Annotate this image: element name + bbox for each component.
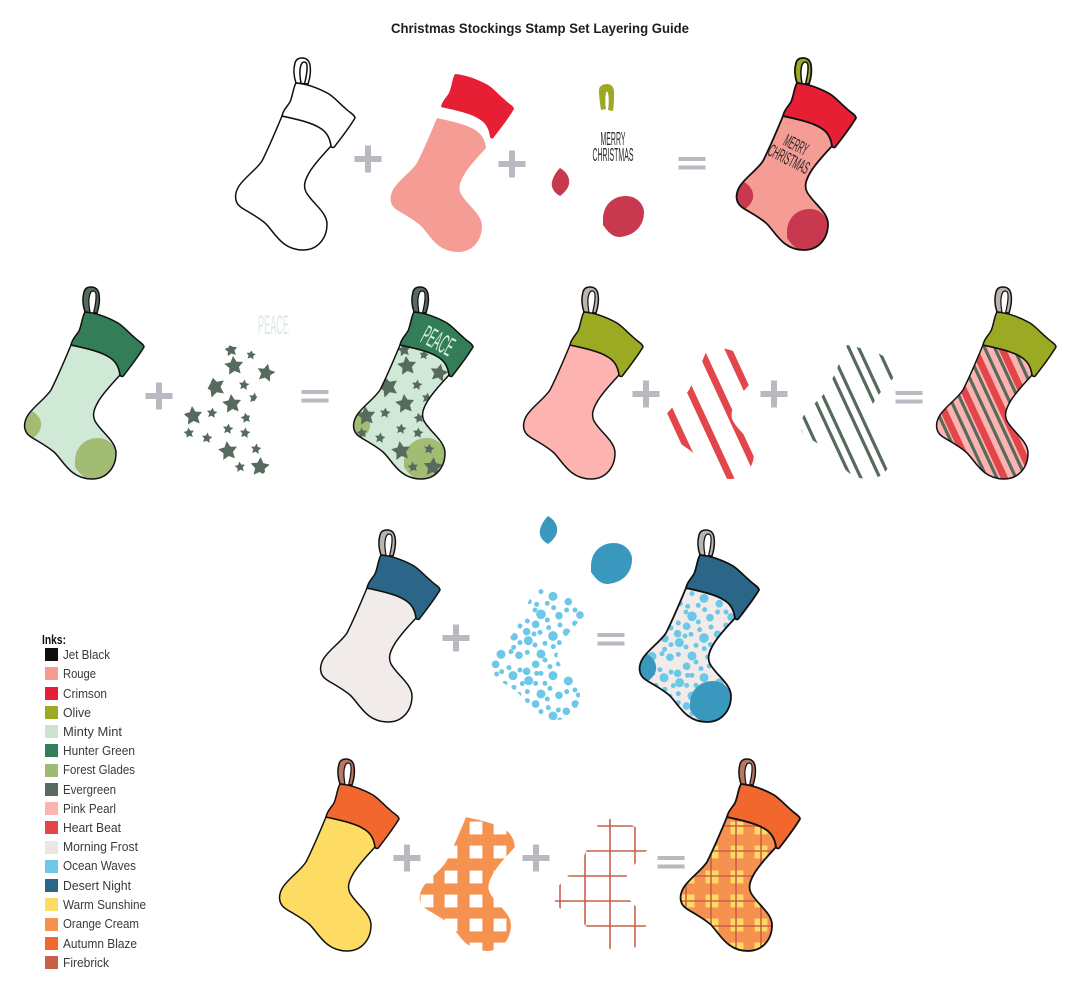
stocking: finished plaid — [680, 758, 801, 952]
legend: inks — [42, 633, 146, 970]
legend: inks: Morning Frost — [63, 840, 139, 854]
legend: inks: Minty Mint — [63, 725, 123, 739]
equals sign — [896, 391, 922, 404]
plus sign — [442, 624, 470, 652]
legend: inks: Autumn Blaze — [63, 937, 137, 951]
layer: olive loop, greeting, toe and heel — [552, 84, 644, 237]
layer: evergreen stripes — [800, 345, 894, 479]
legend: inks: Crimson — [63, 687, 107, 701]
stocking: finished green — [353, 287, 473, 479]
plus sign — [760, 380, 788, 408]
plus sign — [632, 380, 660, 408]
equals sign — [658, 856, 684, 868]
equals sign — [598, 633, 624, 646]
panel: row 2 striped stocking — [524, 287, 1080, 489]
panel: row 2 green star stocking: PEACE — [258, 310, 289, 340]
stocking: finished red — [736, 58, 856, 250]
panel: row 3 blue dotted stocking — [321, 516, 759, 724]
legend: inks: Pink Pearl — [63, 802, 116, 816]
layer: olive loop, greeting, toe and heel: MERRY — [600, 129, 626, 149]
legend: inks: Heart Beat — [63, 821, 121, 835]
stocking: warm sunshine and autumn blaze base — [280, 759, 399, 951]
layer: firebrick grid lines — [554, 818, 648, 950]
legend heading: Inks: — [42, 633, 66, 647]
panel: row 2 green star stocking — [24, 287, 473, 479]
layer: orange cream plaid — [420, 817, 515, 955]
legend: inks: Jet Black — [63, 648, 111, 662]
stocking: minty mint and hunter green base — [24, 287, 144, 479]
legend: inks: Evergreen — [63, 783, 116, 797]
plus sign — [498, 150, 526, 178]
plus sign — [146, 382, 172, 410]
stocking: jet black outline — [236, 58, 355, 250]
legend: inks: Firebrick — [63, 956, 110, 970]
panel: row 1 red stocking layers: CHRISTMAS — [592, 145, 634, 165]
legend: inks: Olive — [63, 706, 91, 720]
stocking: finished red: CHRISTMAS — [765, 140, 813, 178]
layer: heart beat stripes — [667, 348, 754, 479]
legend: inks: Rouge — [63, 667, 96, 681]
plus sign — [522, 844, 550, 872]
legend: inks: Orange Cream — [63, 917, 139, 931]
stocking: finished dotted — [639, 530, 759, 724]
layer: rouge body and crimson cuff — [391, 74, 514, 252]
stocking: finished red: MERRY — [780, 130, 812, 160]
stocking: morning frost and desert night base — [321, 530, 440, 722]
panel: row 1 red stocking layers — [236, 58, 856, 252]
legend: inks: Desert Night — [63, 879, 132, 893]
title: Christmas Stockings Stamp Set Layering Guide — [391, 20, 689, 36]
legend: inks: Warm Sunshine — [63, 898, 146, 912]
equals sign — [678, 157, 706, 170]
legend: inks: Ocean Waves — [63, 859, 136, 873]
stocking: finished green: PEACE — [416, 320, 460, 362]
panel: row 4 orange plaid stocking — [280, 759, 800, 961]
legend: inks: Hunter Green — [63, 744, 135, 758]
plus sign — [394, 844, 420, 872]
stocking: finished striped — [936, 286, 1057, 480]
layer: blue toe, heel and ocean waves dots — [492, 516, 632, 722]
layer: peace greeting and evergreen stars — [182, 310, 289, 476]
legend: inks: Forest Glades — [63, 763, 135, 777]
equals sign — [302, 390, 328, 402]
plus sign — [354, 146, 382, 172]
stocking: pink pearl and olive base — [524, 287, 643, 479]
